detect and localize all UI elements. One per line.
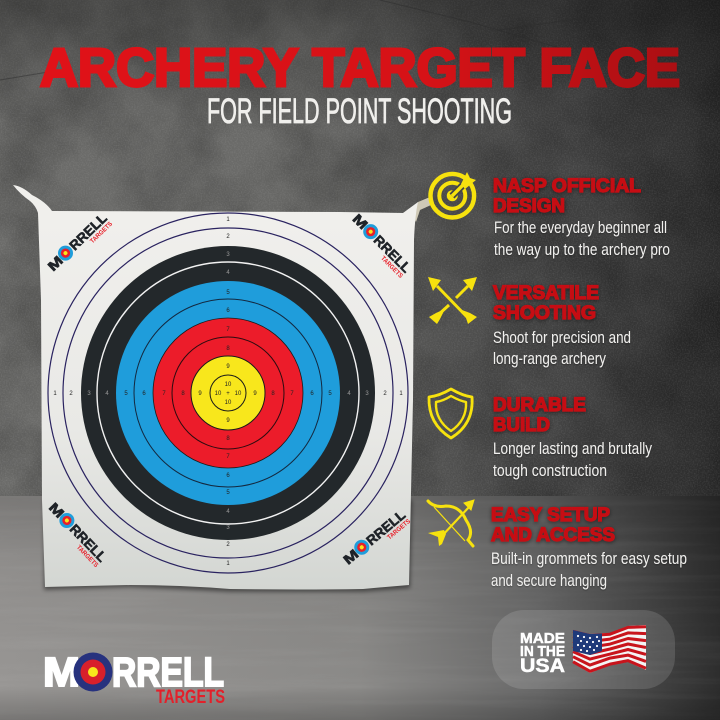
small logo: top left: M xyxy=(45,253,66,274)
ring score numbers: 4 xyxy=(226,509,230,515)
logo word: RRELL: RRELL xyxy=(112,649,224,695)
badge text: IN THE xyxy=(520,643,565,660)
small logo: bottom left: M xyxy=(46,500,67,521)
feature: NASP official design xyxy=(430,172,670,259)
made in the USA badge xyxy=(492,610,675,689)
description line 2: tough construction xyxy=(493,461,607,480)
heading: VERSATILE xyxy=(493,283,599,304)
ring score numbers: 9 xyxy=(226,364,230,370)
subtitle: FOR FIELD POINT SHOOTING xyxy=(207,92,512,131)
ring score numbers: 8 xyxy=(226,436,230,442)
ring score numbers: 3 xyxy=(226,525,230,531)
hanging tab: right xyxy=(410,197,431,222)
ring score numbers xyxy=(53,217,403,567)
description: Longer lasting and brutally xyxy=(493,439,652,458)
badge text xyxy=(520,630,565,677)
heading line 2: BUILD xyxy=(493,415,550,436)
ring score numbers: 1 xyxy=(53,391,57,397)
icon: bullseye with arrow xyxy=(430,172,476,218)
feature: easy setup and access xyxy=(428,500,687,590)
ring score numbers: 5 xyxy=(124,391,128,397)
ring score numbers: 2 xyxy=(226,234,230,240)
ring score numbers: 6 xyxy=(226,473,230,479)
description: Shoot for precision and xyxy=(493,328,631,347)
ring score numbers: + xyxy=(226,391,230,397)
ring score numbers: 9 xyxy=(253,391,257,397)
heading line 2: DESIGN xyxy=(493,196,565,217)
cloth panel xyxy=(13,185,418,590)
badge pill xyxy=(492,610,675,689)
heading: EASY SETUP xyxy=(491,505,610,526)
logo bullseye xyxy=(74,652,112,692)
small logo: bottom left: TARGETS xyxy=(75,544,100,569)
icon: bow and arrow xyxy=(428,500,474,546)
heading: DURABLE xyxy=(493,395,586,416)
ring score numbers: 10 xyxy=(215,391,222,397)
small logo: bottom right xyxy=(340,506,413,572)
ring score numbers: 3 xyxy=(365,391,369,397)
ring score numbers: 3 xyxy=(226,252,230,258)
ring score numbers: 5 xyxy=(328,391,332,397)
Morrell Targets logo xyxy=(43,649,225,708)
small logo: top left xyxy=(44,210,114,278)
heading: NASP OFFICIAL xyxy=(493,176,641,197)
ring score numbers: 6 xyxy=(226,308,230,314)
target rings xyxy=(48,213,408,573)
icon: American flag xyxy=(573,625,646,673)
heading line 2: SHOOTING xyxy=(493,303,596,324)
target shadow xyxy=(44,500,412,592)
small logo: bottom right: RRELL xyxy=(363,507,408,548)
ring score numbers: 4 xyxy=(347,391,351,397)
ring score numbers: 2 xyxy=(383,391,387,397)
ring score numbers: 5 xyxy=(226,290,230,296)
description line 2: long-range archery xyxy=(493,349,606,368)
small logo: top right: TARGETS xyxy=(379,255,404,280)
ring score numbers: 8 xyxy=(226,346,230,352)
ring score numbers: 6 xyxy=(310,391,314,397)
small logo: top right xyxy=(345,211,415,280)
logo word: TARGETS: TARGETS xyxy=(156,687,225,708)
ring score numbers: 9 xyxy=(198,391,202,397)
ring score numbers: 9 xyxy=(226,418,230,424)
ring score numbers: 4 xyxy=(105,391,109,397)
ring score numbers: 7 xyxy=(226,454,230,460)
title: ARCHERY TARGET FACE xyxy=(40,38,680,98)
ring score numbers: 6 xyxy=(142,391,146,397)
ring score numbers: 4 xyxy=(226,270,230,276)
target face xyxy=(13,185,431,592)
small logo: bottom right: M xyxy=(340,546,362,568)
icon: shield xyxy=(429,389,472,438)
small logo: bottom left: RRELL xyxy=(67,521,109,565)
ring score numbers: 2 xyxy=(226,542,230,548)
description line 2: and secure hanging xyxy=(491,571,607,590)
ring score numbers: 7 xyxy=(162,391,166,397)
ring score numbers: 1 xyxy=(226,561,230,567)
small logo: bottom left xyxy=(42,499,110,569)
ring score numbers: 7 xyxy=(226,327,230,333)
description: For the everyday beginner all xyxy=(494,218,667,237)
icon: crossed arrows xyxy=(428,277,477,324)
ring score numbers: 1 xyxy=(226,217,230,223)
small logo: top left: RRELL xyxy=(66,211,110,253)
ring score numbers: 8 xyxy=(181,391,185,397)
ring score numbers: 5 xyxy=(226,490,230,496)
small logo: bottom right: TARGETS xyxy=(386,518,413,541)
background: concrete wall xyxy=(0,0,720,498)
ring score numbers: 7 xyxy=(290,391,294,397)
description line 2: the way up to the archery pro xyxy=(494,240,670,259)
ring score numbers: 3 xyxy=(87,391,91,397)
feature: durable build xyxy=(429,389,652,480)
small logo: top right: RRELL xyxy=(371,232,414,276)
ring score numbers: 1 xyxy=(399,391,403,397)
ring score numbers: 2 xyxy=(69,391,73,397)
background: floor xyxy=(0,496,720,720)
ring score numbers: 10 xyxy=(225,400,232,406)
ring score numbers: 10 xyxy=(235,391,242,397)
feature: versatile shooting xyxy=(428,277,631,368)
ring score numbers: 10 xyxy=(225,382,232,388)
small logo: top right: M xyxy=(349,211,371,232)
heading line 2: AND ACCESS xyxy=(491,525,615,546)
badge text: USA xyxy=(520,656,565,677)
ring score numbers: 8 xyxy=(271,391,275,397)
small logo: top left: TARGETS xyxy=(89,220,114,245)
badge text: MADE xyxy=(520,630,565,647)
logo word: M: M xyxy=(43,649,80,695)
